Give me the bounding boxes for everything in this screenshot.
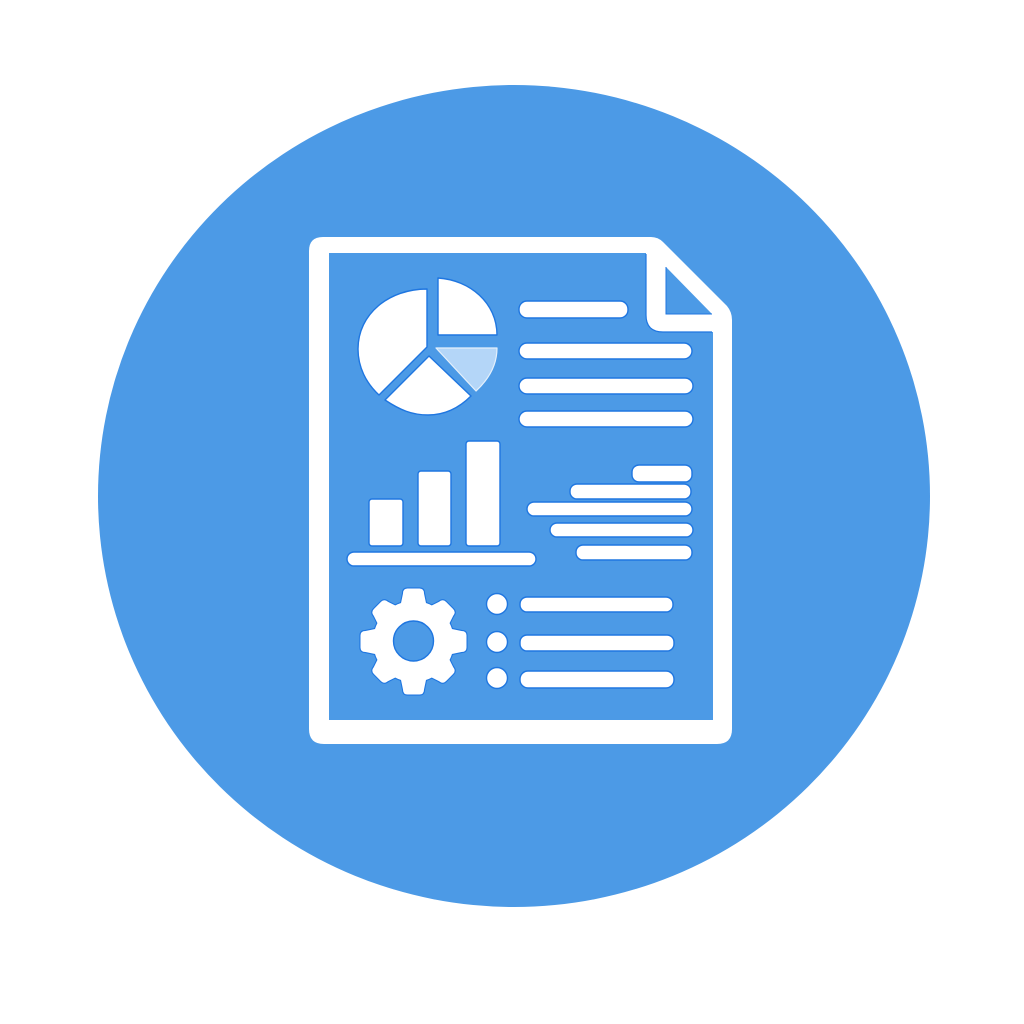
bar chart — [347, 441, 536, 566]
pie slice: large left — [358, 289, 427, 395]
pie slice: bottom — [385, 356, 471, 415]
text lines beside pie chart — [519, 301, 693, 427]
pie slice: highlighted light blue — [436, 348, 497, 391]
bullet row 2 — [486, 632, 674, 652]
bullet row 3 — [486, 668, 674, 688]
pie slice: top right — [438, 278, 497, 335]
bar: tall — [466, 441, 500, 546]
icon: gear — [360, 588, 466, 694]
right-aligned staggered lines — [527, 465, 693, 560]
bullet row 1 — [486, 594, 673, 614]
document page outline — [309, 237, 732, 744]
bar: short — [369, 499, 403, 546]
bar chart baseline — [347, 552, 536, 566]
background circle — [98, 85, 930, 907]
bar: medium — [418, 471, 451, 546]
pie chart — [358, 278, 497, 415]
bullet list — [486, 594, 674, 688]
